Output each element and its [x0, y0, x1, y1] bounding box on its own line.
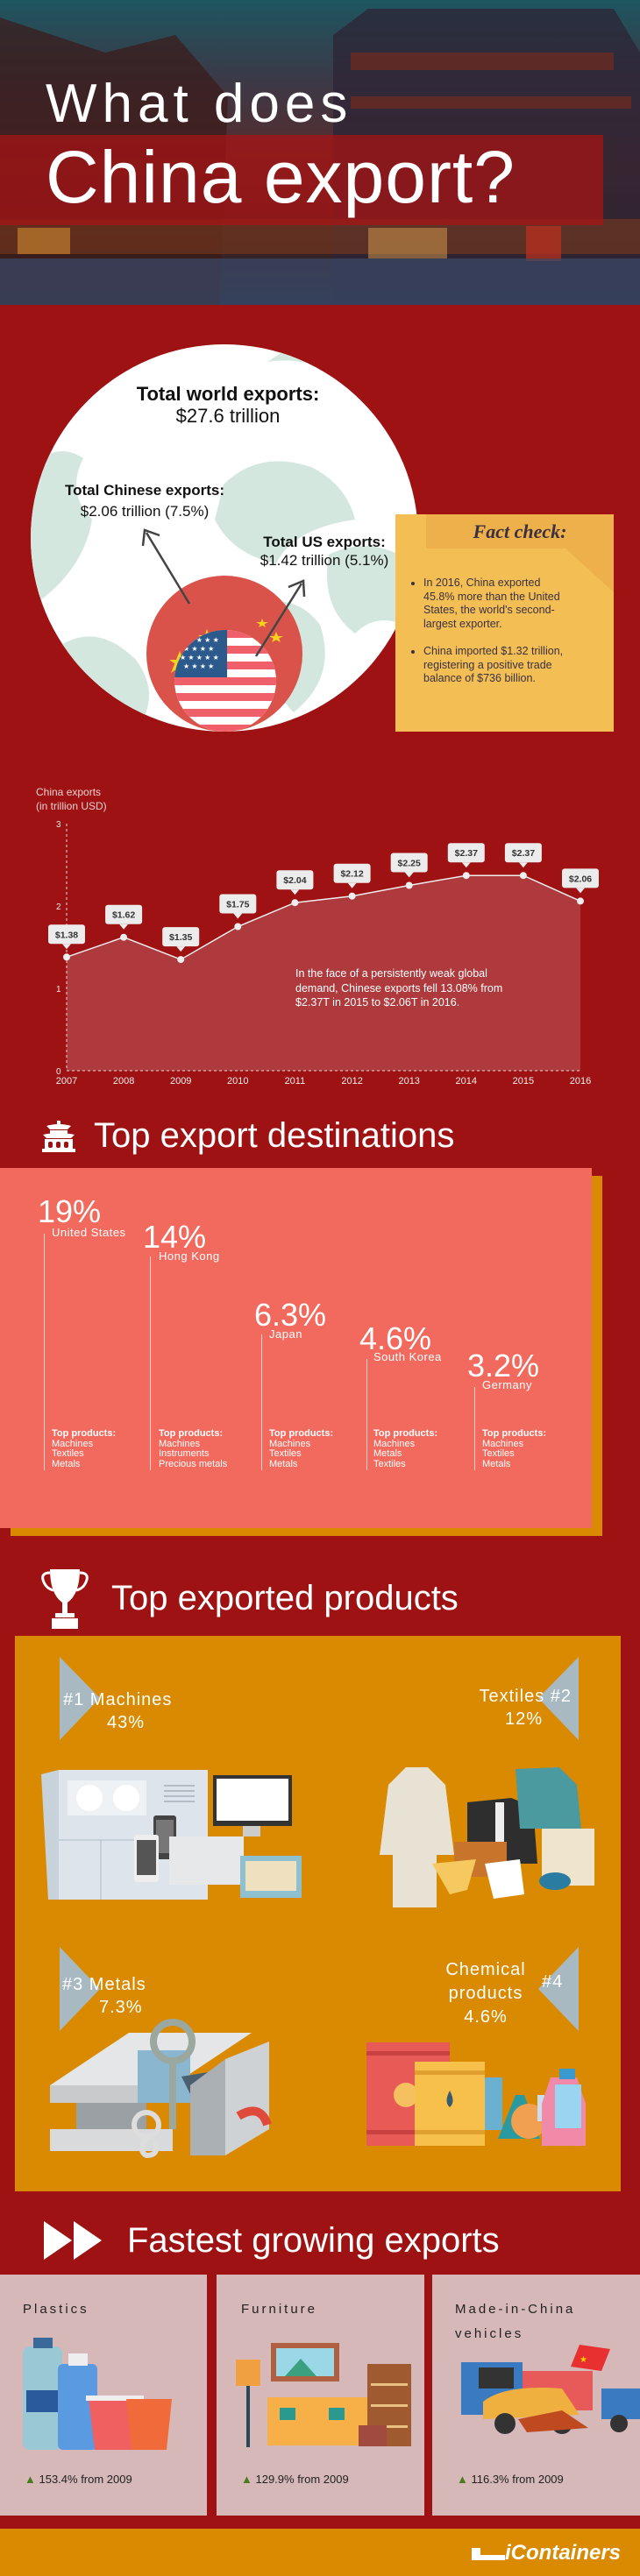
icon: fast forward	[44, 2221, 102, 2260]
line chart: China exports	[36, 786, 101, 798]
line chart: $1.75	[226, 899, 250, 909]
line chart: 2015	[513, 1076, 534, 1086]
line chart: $1.38	[55, 930, 78, 940]
panel: destinations: 4.6%	[359, 1320, 431, 1356]
panel: destinations: 14%	[143, 1219, 206, 1255]
card: plastics: ▲ 153.4% from 2009	[25, 2473, 132, 2486]
panel: destinations: Machines	[373, 1439, 415, 1449]
card: furniture: ▲ 129.9% from 2009	[241, 2473, 349, 2486]
panel: destinations: Precious metals	[159, 1458, 227, 1468]
label: #3 metals	[62, 1975, 146, 2017]
logo: iContainers: iContainers	[505, 2541, 621, 2565]
line chart: 2016	[570, 1076, 591, 1086]
label: #1 machines: 43%	[107, 1713, 145, 1732]
heading: fastest growing exports: Fastest growing exports	[127, 2221, 500, 2260]
line chart: 1	[56, 985, 61, 994]
globe graphic	[31, 344, 417, 732]
panel: destinations: Germany	[482, 1378, 532, 1391]
line chart: $2.04	[283, 875, 307, 886]
panel: destinations: Metals	[373, 1448, 402, 1459]
panel: destinations: Machines	[52, 1439, 93, 1449]
icon: temple	[42, 1121, 75, 1152]
title	[46, 74, 516, 218]
card: vehicles: vehicles	[455, 2326, 523, 2341]
label: #3 metals: 7.3%	[99, 1998, 143, 2017]
panel: destinations: Textiles	[52, 1448, 84, 1459]
illustration: chemicals	[366, 2042, 586, 2146]
card: plastics: Plastics	[23, 2302, 89, 2317]
panel: destinations: Metals	[482, 1458, 510, 1468]
line chart: demand, Chinese exports fell 13.08% from	[295, 982, 502, 994]
card: vehicles: Made-in-China	[455, 2302, 575, 2317]
panel: destinations: Top products:	[373, 1428, 437, 1439]
panel: products: #4	[542, 1972, 563, 1992]
panel: destinations: Top products:	[482, 1428, 546, 1439]
footer band	[0, 2529, 640, 2576]
red circle	[146, 576, 302, 732]
panel: destinations: 19%	[38, 1193, 101, 1229]
fact check box	[395, 514, 614, 732]
fact check box: In 2016, China exported 45.8% more than the United States, the world's second-largest exporter.	[423, 577, 560, 629]
title: What does	[46, 74, 352, 134]
arrows	[143, 530, 304, 656]
heading: top export destinations: Top export destinations	[94, 1116, 454, 1155]
header photo background	[0, 0, 640, 305]
title: China export?	[46, 136, 516, 218]
illustration: machines	[41, 1770, 302, 1900]
label: chemical products #4	[445, 1960, 563, 2027]
line chart: 2009	[170, 1076, 191, 1086]
globe graphic: ★ ★ ★ ★	[183, 645, 214, 653]
panel: destinations: South Korea	[373, 1350, 442, 1363]
panel: destinations: Metals	[269, 1458, 297, 1468]
globe labels: $27.6 trillion	[176, 405, 280, 427]
globe labels	[137, 383, 319, 427]
card: furniture	[217, 2275, 424, 2516]
panel: destinations: Machines	[269, 1439, 310, 1449]
illustration: metals	[50, 2022, 269, 2155]
panel: destinations: Metals	[52, 1458, 80, 1468]
line chart: 2012	[341, 1076, 363, 1086]
panel: destinations: Top products:	[52, 1428, 116, 1439]
panel shadow	[11, 1176, 602, 1536]
panel: destinations: 6.3%	[254, 1297, 326, 1333]
line chart: $2.06	[569, 874, 592, 884]
line chart: 2010	[227, 1076, 249, 1086]
panel: destinations: Textiles	[269, 1448, 302, 1459]
line chart: $1.62	[112, 910, 135, 921]
title band	[0, 135, 603, 225]
label: #1 machines	[63, 1690, 172, 1732]
panel: destinations: Textiles	[482, 1448, 515, 1459]
panel: destinations: Textiles	[373, 1458, 406, 1468]
line chart: 2014	[456, 1076, 477, 1086]
globe graphic: ★ ★ ★ ★	[183, 662, 214, 670]
line chart: $2.37T in 2015 to $2.06T in 2016.	[295, 996, 459, 1008]
line chart: 2	[56, 902, 61, 912]
line chart: $2.37	[512, 848, 535, 859]
line chart: $2.25	[398, 859, 421, 869]
card: plastics	[0, 2275, 207, 2516]
line chart: $1.35	[169, 932, 192, 943]
panel: destinations: 3.2%	[467, 1348, 539, 1384]
card: vehicles	[432, 2275, 640, 2516]
card: vehicles: ★	[580, 2355, 587, 2365]
panel: destinations: Hong Kong	[159, 1249, 220, 1263]
fact check box: China imported $1.32 trillion, registering a positive trade balance of $736 billion.	[423, 645, 563, 684]
globe labels: Total world exports:	[137, 383, 319, 405]
label: #1 machines: #1 Machines	[63, 1690, 172, 1709]
panel: destinations: Top products:	[159, 1428, 223, 1439]
line chart: 3	[56, 820, 61, 830]
panel: destinations: Machines	[482, 1439, 523, 1449]
line chart	[36, 786, 599, 1086]
panel: destinations: Instruments	[159, 1448, 209, 1459]
panel: destinations: Japan	[269, 1327, 302, 1341]
line chart: $2.12	[340, 869, 364, 880]
label: textiles #2: 12%	[505, 1709, 543, 1729]
fact check box: Fact check:	[473, 520, 566, 542]
label: textiles #2: Textiles #2	[479, 1687, 572, 1706]
line chart: 0	[56, 1067, 61, 1077]
panel: destinations	[0, 1168, 592, 1528]
label: textiles #2	[479, 1687, 572, 1729]
globe graphic: ★ ★ ★ ★ ★	[180, 636, 219, 644]
illustration: textiles	[380, 1767, 594, 1907]
line chart: 2007	[56, 1076, 77, 1086]
icon: trophy	[41, 1569, 89, 1629]
panel: destinations: United States	[52, 1226, 126, 1239]
panel: products	[15, 1636, 621, 2191]
panel: destinations: Top products:	[269, 1428, 333, 1439]
text: Total Chinese exports:	[65, 482, 224, 499]
text: Total US exports:	[263, 534, 386, 550]
card: vehicles: ▲ 116.3% from 2009	[457, 2473, 564, 2486]
line chart: 2011	[285, 1076, 305, 1086]
line chart: 2013	[398, 1076, 420, 1086]
text: $2.06 trillion (7.5%)	[81, 503, 209, 520]
card: furniture: Furniture	[241, 2302, 317, 2317]
panel: products: Chemical products 4.6%	[445, 1960, 526, 2027]
globe graphic: ★ ★ ★ ★ ★	[180, 654, 219, 662]
text: $1.42 trillion (5.1%)	[260, 552, 388, 569]
label: #3 metals: #3 Metals	[62, 1975, 146, 1994]
line chart: In the face of a persistently weak global	[295, 967, 487, 980]
line chart: (in trillion USD)	[36, 800, 107, 812]
line chart: 2008	[113, 1076, 134, 1086]
line chart: $2.37	[455, 848, 478, 859]
panel: destinations: Machines	[159, 1439, 200, 1449]
heading: top exported products: Top exported products	[111, 1579, 459, 1617]
